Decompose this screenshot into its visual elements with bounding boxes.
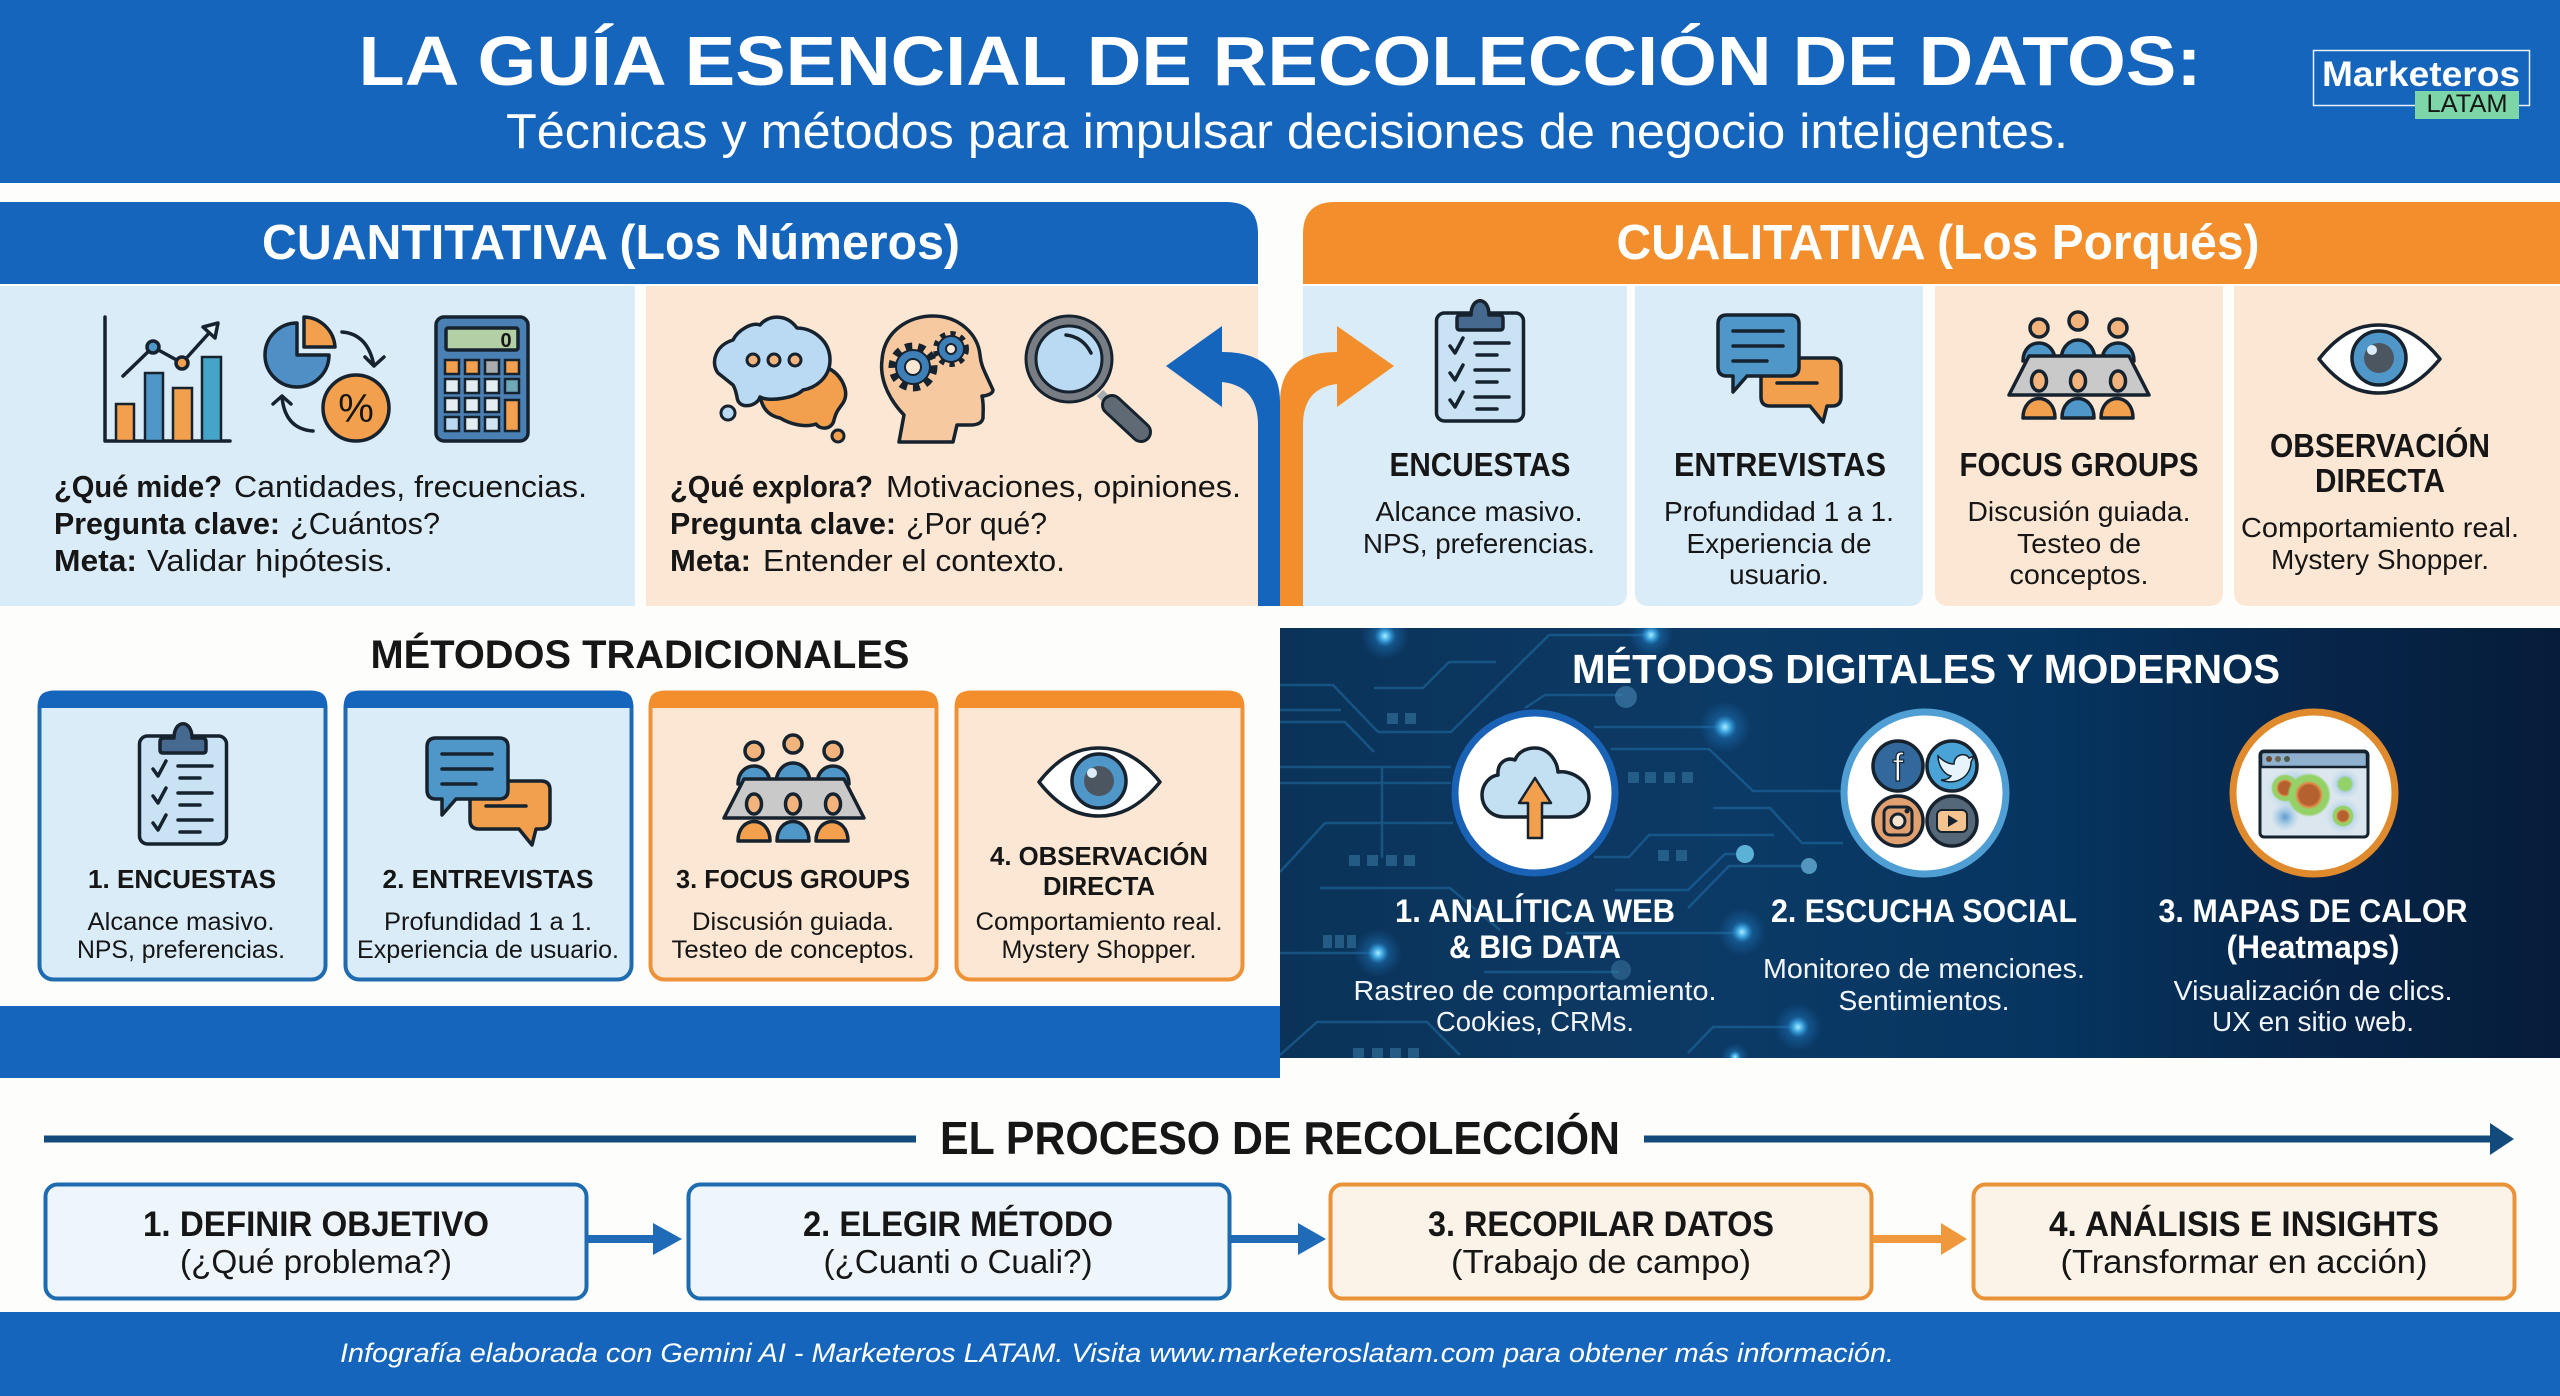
method: mapas de calor: 3. MAPAS DE CALOR: [2158, 893, 2468, 929]
logo: Marketeros LATAM: Marketeros: [2322, 55, 2520, 94]
card: 3 focus groups: [649, 691, 938, 980]
logo: Marketeros LATAM: LATAM: [2426, 90, 2508, 118]
heading: métodos digitales: MÉTODOS DIGITALES Y MODERNOS: [1572, 646, 2280, 692]
method: escucha social: Monitoreo de menciones.: [1763, 953, 2085, 984]
card: observación directa: [2234, 286, 2560, 606]
footer: [0, 1312, 2560, 1396]
card: observación directa: Comportamiento real.: [2241, 512, 2519, 543]
card: 3 focus groups: 3. FOCUS GROUPS: [676, 864, 910, 894]
card: 2 entrevistas: Profundidad 1 a 1.: [384, 908, 592, 936]
card: 4 observación directa: Comportamiento real.: [976, 908, 1222, 936]
text: qué explora: Pregunta clave:: [670, 506, 896, 541]
subpanel: qué mide: [0, 286, 635, 606]
text: qué mide: Cantidades, frecuencias.: [234, 469, 587, 504]
icon: clipboard: [140, 724, 226, 844]
step 1: 1. DEFINIR OBJETIVO: [143, 1205, 489, 1244]
panel: métodos digitales: [1280, 612, 2560, 1071]
card: encuestas: NPS, preferencias.: [1363, 528, 1595, 559]
text: qué mide: Pregunta clave:: [54, 506, 280, 541]
icon: clipboard: [1436, 301, 1524, 421]
text: qué explora: Meta:: [670, 543, 751, 578]
card: 2 entrevistas: 2. ENTREVISTAS: [382, 864, 594, 894]
icon: heatmap window: [2260, 751, 2368, 837]
heading: métodos tradicionales: MÉTODOS TRADICIONALES: [370, 632, 910, 677]
footer: Infografía elaborada con Gemini AI - Marketeros LATAM. Visita www.marketeroslatam.com para obtener más información.: [340, 1338, 1894, 1368]
icon: group at table: [724, 735, 864, 841]
text: qué mide: ¿Qué mide?: [54, 469, 222, 504]
step 2: [688, 1184, 1230, 1298]
text: qué explora: ¿Por qué?: [906, 506, 1047, 541]
step 2: (¿Cuanti o Cuali?): [824, 1243, 1092, 1280]
arrow: blue curved left: [1166, 326, 1280, 606]
panel: cualitativa: [1303, 202, 2560, 606]
icon: thought clouds: [714, 317, 846, 442]
method: analítica web: Rastreo de comportamiento.: [1354, 975, 1716, 1006]
method: escucha social: [1763, 712, 2085, 1016]
subtitle: Técnicas y métodos para impulsar decisiones de negocio inteligentes.: [506, 105, 2068, 159]
section: proceso de recolección: [44, 1112, 2514, 1298]
text: qué mide: ¿Cuántos?: [290, 506, 440, 541]
heading: cualitativa: CUALITATIVA (Los Porqués): [1616, 216, 2260, 270]
text: qué explora: Entender el contexto.: [763, 543, 1065, 578]
method: mapas de calor: (Heatmaps): [2226, 929, 2400, 965]
subpanel: qué explora: [646, 286, 1258, 606]
step 4: (Transformar en acción): [2060, 1243, 2428, 1280]
card: 3 focus groups: Testeo de conceptos.: [672, 936, 914, 964]
text: qué explora: [670, 469, 1241, 578]
card: encuestas: Alcance masivo.: [1376, 496, 1582, 527]
step 3: 3. RECOPILAR DATOS: [1428, 1205, 1774, 1244]
card: observación directa: OBSERVACIÓN: [2270, 427, 2490, 464]
card: 4 observación directa: 4. OBSERVACIÓN: [990, 841, 1208, 871]
card: encuestas: ENCUESTAS: [1390, 446, 1570, 483]
icon: chat bubbles: [427, 738, 550, 845]
step 4: 4. ANÁLISIS E INSIGHTS: [2049, 1204, 2439, 1244]
card: focus groups: [1935, 286, 2223, 606]
card: 3 focus groups: Discusión guiada.: [692, 908, 894, 936]
step 3: [1330, 1184, 1872, 1298]
circuit background: [1280, 612, 1843, 1071]
icon: calculator: [436, 317, 528, 441]
icon: bar chart: [105, 317, 230, 441]
logo: Marketeros LATAM: [2314, 50, 2530, 119]
card: entrevistas: [1635, 286, 1923, 606]
title: LA GUÍA ESENCIAL DE RECOLECCIÓN DE DATOS:: [358, 22, 2202, 100]
icon: eye: [1039, 748, 1160, 816]
method: mapas de calor: [2158, 712, 2468, 1037]
step 1: [46, 1184, 586, 1298]
arrow: orange curved right: [1280, 326, 1394, 606]
header banner: [0, 0, 2560, 183]
icon: social networks: f: [1892, 746, 1904, 790]
step 1: (¿Qué problema?): [180, 1243, 452, 1280]
card: encuestas: [1303, 286, 1627, 606]
card: observación directa: DIRECTA: [2315, 462, 2445, 499]
icon: group at table: [2009, 312, 2149, 418]
heading: proceso de recolección: EL PROCESO DE RECOLECCIÓN: [940, 1112, 1620, 1164]
icon: magnifier: [1031, 321, 1141, 432]
card: focus groups: FOCUS GROUPS: [1960, 446, 2198, 483]
icon: pie and percent: [265, 317, 389, 441]
blue band under traditional methods: [0, 1006, 1280, 1078]
card: focus groups: Testeo de: [2017, 528, 2141, 559]
method: mapas de calor: UX en sitio web.: [2212, 1006, 2414, 1037]
step 2: 2. ELEGIR MÉTODO: [803, 1204, 1113, 1244]
method: escucha social: Sentimientos.: [1838, 985, 2010, 1016]
method: analítica web: 1. ANALÍTICA WEB: [1395, 893, 1675, 929]
step 3: (Trabajo de campo): [1451, 1243, 1751, 1280]
method: analítica web: [1354, 713, 1716, 1037]
text: qué explora: ¿Qué explora?: [670, 469, 873, 504]
text: qué explora: Motivaciones, opiniones.: [886, 469, 1241, 504]
step 4: [1974, 1184, 2514, 1298]
text: qué mide: [54, 469, 587, 578]
icon: cloud upload: [1482, 748, 1589, 838]
method: analítica web: Cookies, CRMs.: [1436, 1006, 1634, 1037]
card: 2 entrevistas: [344, 691, 633, 980]
method: mapas de calor: Visualización de clics.: [2174, 975, 2452, 1006]
arrow: step 3 to 4: [1873, 1223, 1967, 1255]
card: focus groups: Discusión guiada.: [1968, 496, 2190, 527]
card: entrevistas: Experiencia de: [1686, 528, 1872, 559]
card: focus groups: conceptos.: [2010, 559, 2148, 590]
icon: head with gears: [882, 316, 993, 442]
heading: cuantitativa: CUANTITATIVA (Los Números): [262, 216, 960, 270]
card: 4 observación directa: [955, 691, 1244, 980]
card: 2 entrevistas: Experiencia de usuario.: [357, 936, 619, 964]
heading: cualitativa: [1303, 202, 2560, 284]
heading: cuantitativa: [0, 202, 1258, 284]
text: qué mide: Meta:: [54, 543, 137, 578]
card: 4 observación directa: DIRECTA: [1043, 871, 1155, 901]
icon: calculator: 0: [500, 330, 512, 352]
card: entrevistas: usuario.: [1729, 559, 1829, 590]
card: 1 encuestas: NPS, preferencias.: [77, 936, 285, 964]
card: 1 encuestas: [38, 691, 327, 980]
panel: cuantitativa: [0, 202, 1258, 606]
panel: métodos tradicionales: [38, 632, 1244, 980]
card: entrevistas: ENTREVISTAS: [1674, 446, 1886, 483]
method: analítica web: & BIG DATA: [1449, 929, 1621, 965]
card: observación directa: Mystery Shopper.: [2271, 544, 2489, 575]
arrow: step 1 to 2: [588, 1223, 682, 1255]
timeline arrow right: [1644, 1123, 2514, 1155]
card: 1 encuestas: 1. ENCUESTAS: [88, 864, 276, 894]
arrow: step 2 to 3: [1231, 1223, 1326, 1255]
icon: eye: [2319, 325, 2440, 393]
icon: social networks: [1873, 741, 1977, 846]
card: entrevistas: Profundidad 1 a 1.: [1664, 496, 1894, 527]
icon: pie and percent: %: [338, 387, 374, 431]
card: 4 observación directa: Mystery Shopper.: [1002, 936, 1196, 964]
timeline line left: [44, 1136, 916, 1142]
text: qué mide: Validar hipótesis.: [147, 543, 393, 578]
method: escucha social: 2. ESCUCHA SOCIAL: [1771, 893, 2077, 929]
card: 1 encuestas: Alcance masivo.: [88, 908, 274, 936]
icon: chat bubbles: [1718, 315, 1841, 422]
